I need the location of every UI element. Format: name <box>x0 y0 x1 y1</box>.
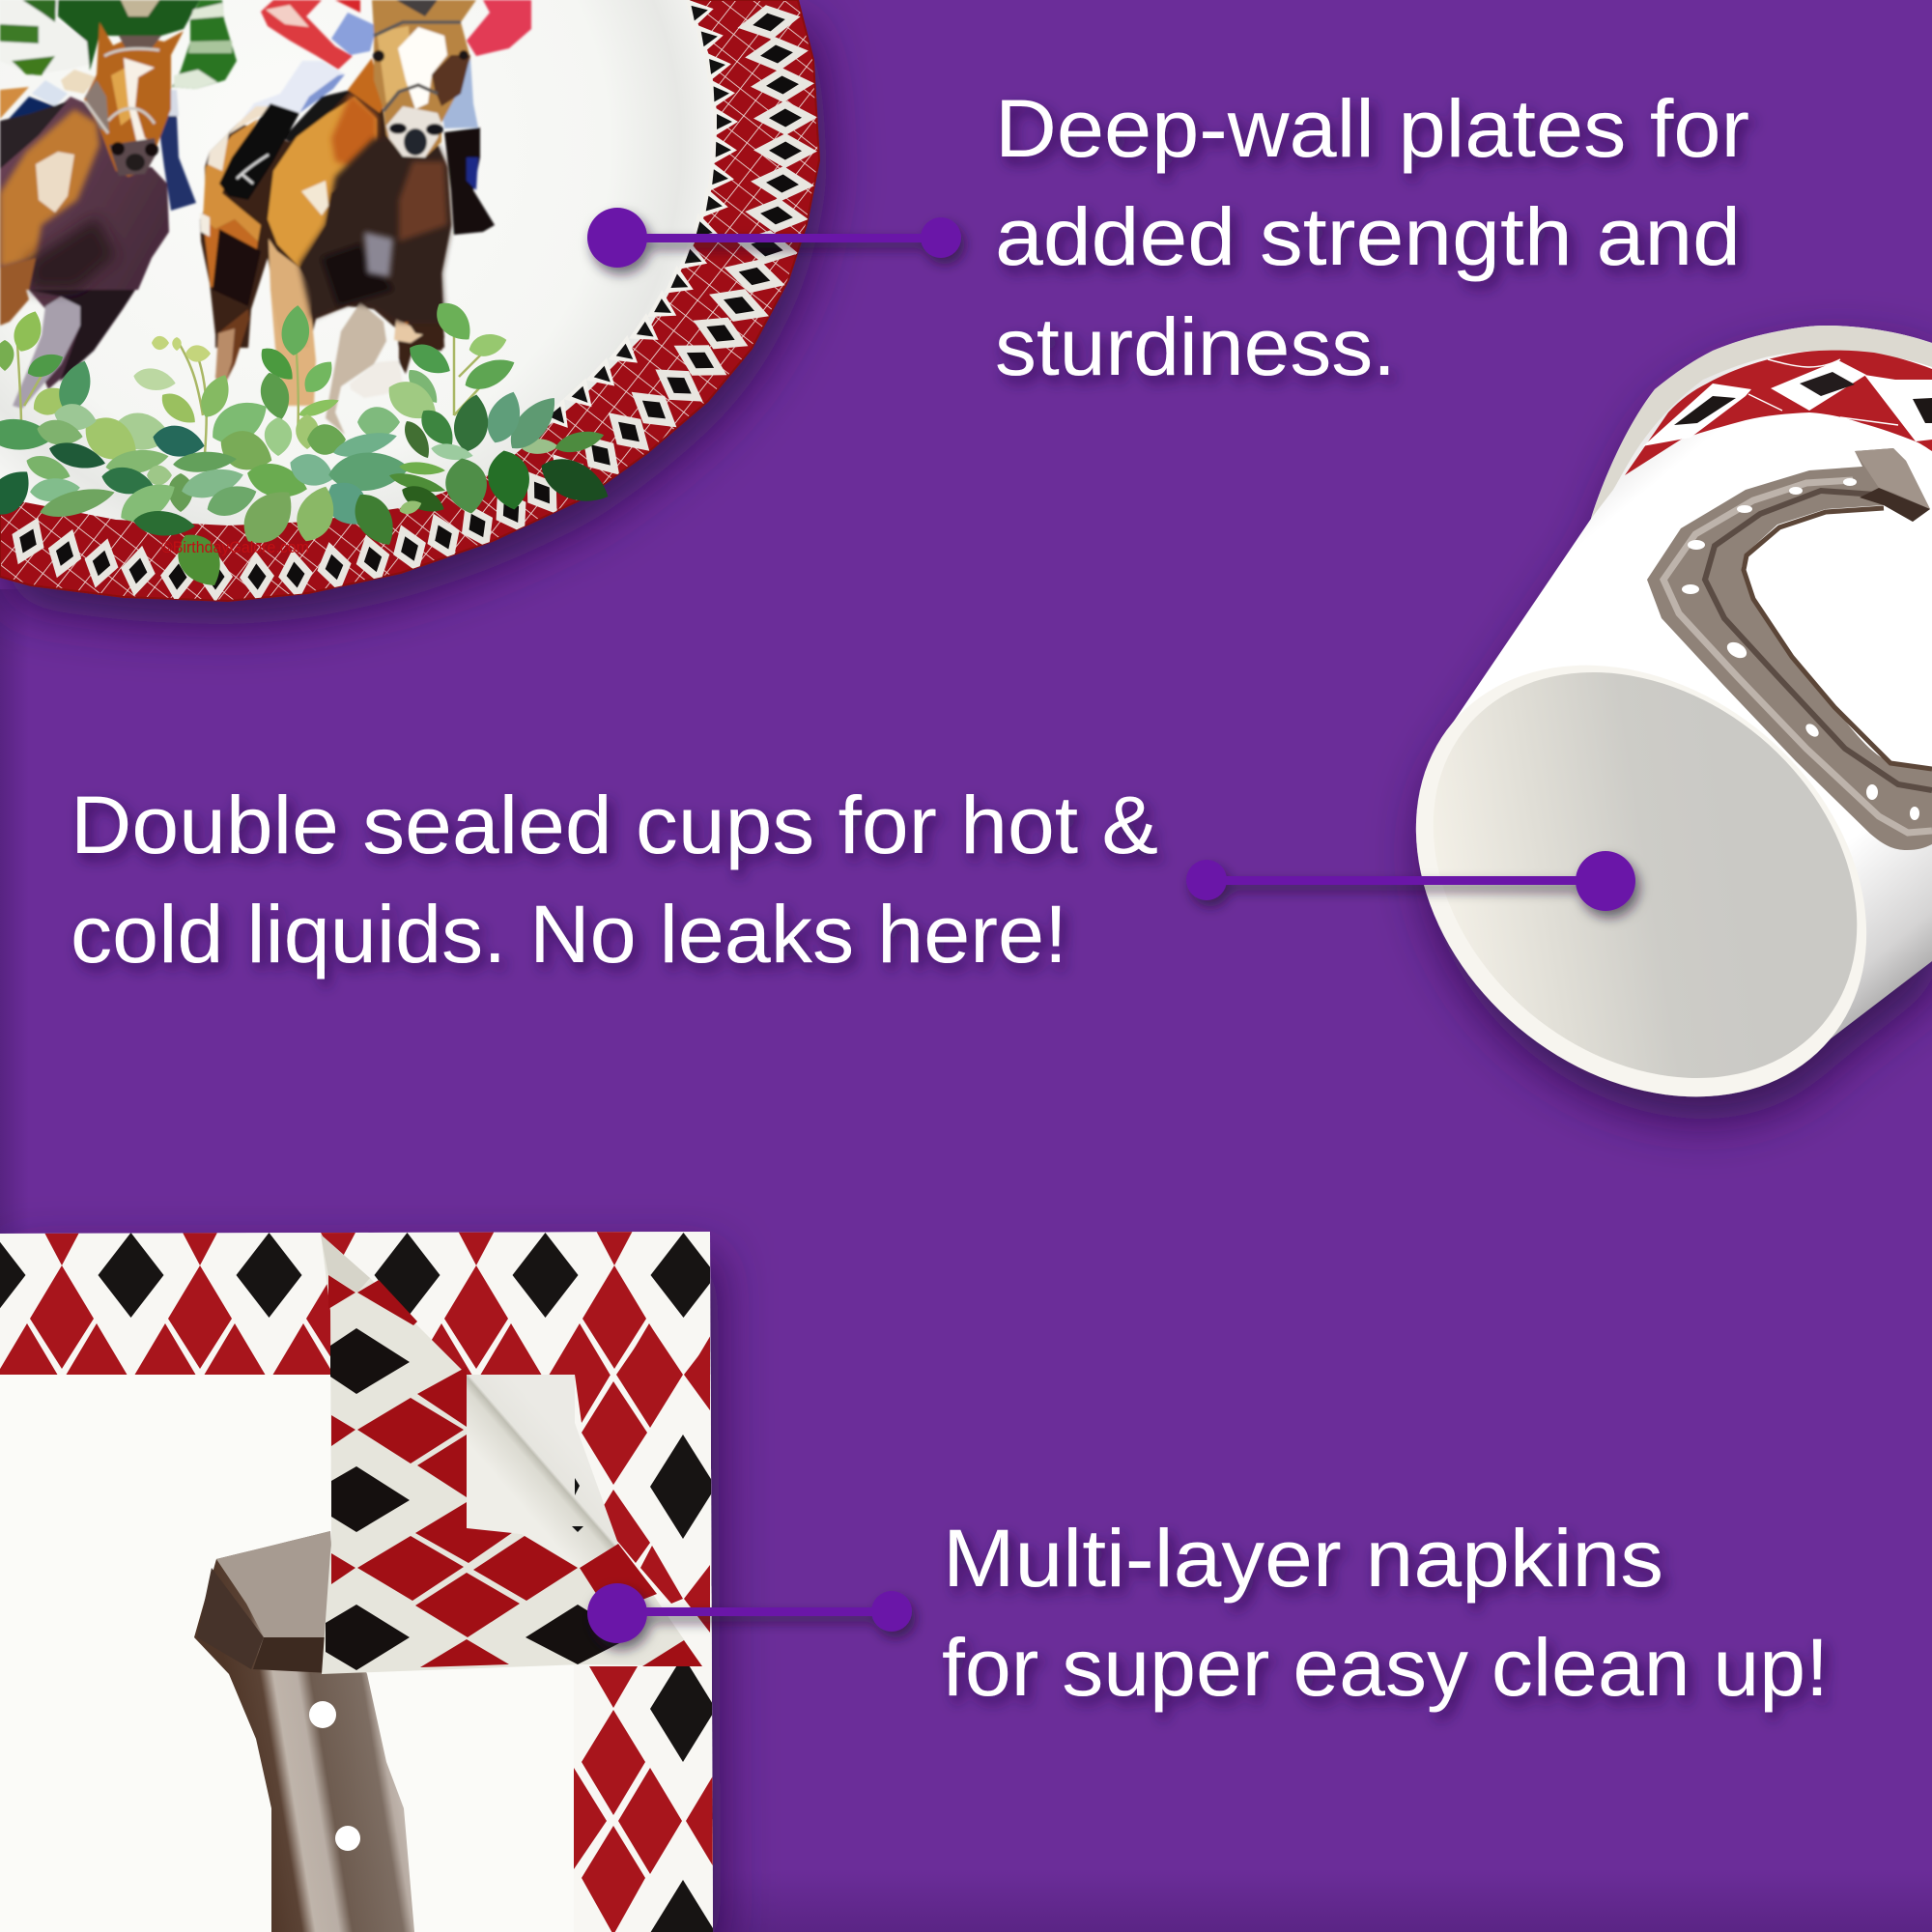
text: plate feature: Deep-wall plates for <box>995 83 1749 174</box>
plate body and rim <box>0 0 819 601</box>
plate centre <box>0 0 718 526</box>
rear legs <box>215 309 249 384</box>
text: plate feature: added strength and <box>995 191 1741 282</box>
text: napkin feature: for super easy clean up! <box>942 1622 1829 1713</box>
napkin right diamond band <box>574 1325 719 1932</box>
left horse and jockey <box>0 0 237 409</box>
sprig stems <box>17 328 490 454</box>
callout connector: plate <box>587 208 961 268</box>
text: cup feature: cold liquids. No leaks here! <box>71 889 1067 980</box>
plate with horses <box>0 0 819 604</box>
callout connector: cup <box>1186 851 1635 911</box>
napkin horseshoe <box>194 1531 414 1932</box>
cup horseshoe <box>1647 448 1932 850</box>
cup body <box>1329 326 1932 1186</box>
cup <box>1396 321 1932 1148</box>
cup open end <box>1352 588 1932 1162</box>
right horse body <box>200 65 451 348</box>
rim diamonds <box>2 0 817 604</box>
folded corner flap <box>321 1235 702 1674</box>
text: napkin feature: Multi-layer napkins <box>943 1513 1663 1604</box>
callout connector: napkin <box>587 1583 912 1643</box>
napkin <box>0 1232 719 1932</box>
text: cup feature: Double sealed cups for hot & <box>71 780 1158 870</box>
right horse head <box>348 58 384 113</box>
rim inner triangles <box>540 0 738 438</box>
text: cup feature <box>71 780 1158 980</box>
text: plate feature: sturdiness. <box>995 301 1396 392</box>
text: napkin feature <box>942 1513 1829 1713</box>
napkin sheet <box>0 1232 713 1932</box>
coat colours <box>203 219 258 290</box>
leaf garland <box>0 295 615 595</box>
cup red diamond band <box>1625 351 1932 475</box>
right horse and jockey <box>200 0 531 435</box>
folded back of napkin <box>467 1375 618 1568</box>
text: plate feature <box>995 83 1749 392</box>
napkin top diamond band <box>0 1232 710 1375</box>
plate watermark: ©BirthdayGalore.com <box>161 538 309 556</box>
cup rolled rim <box>1591 326 1932 519</box>
